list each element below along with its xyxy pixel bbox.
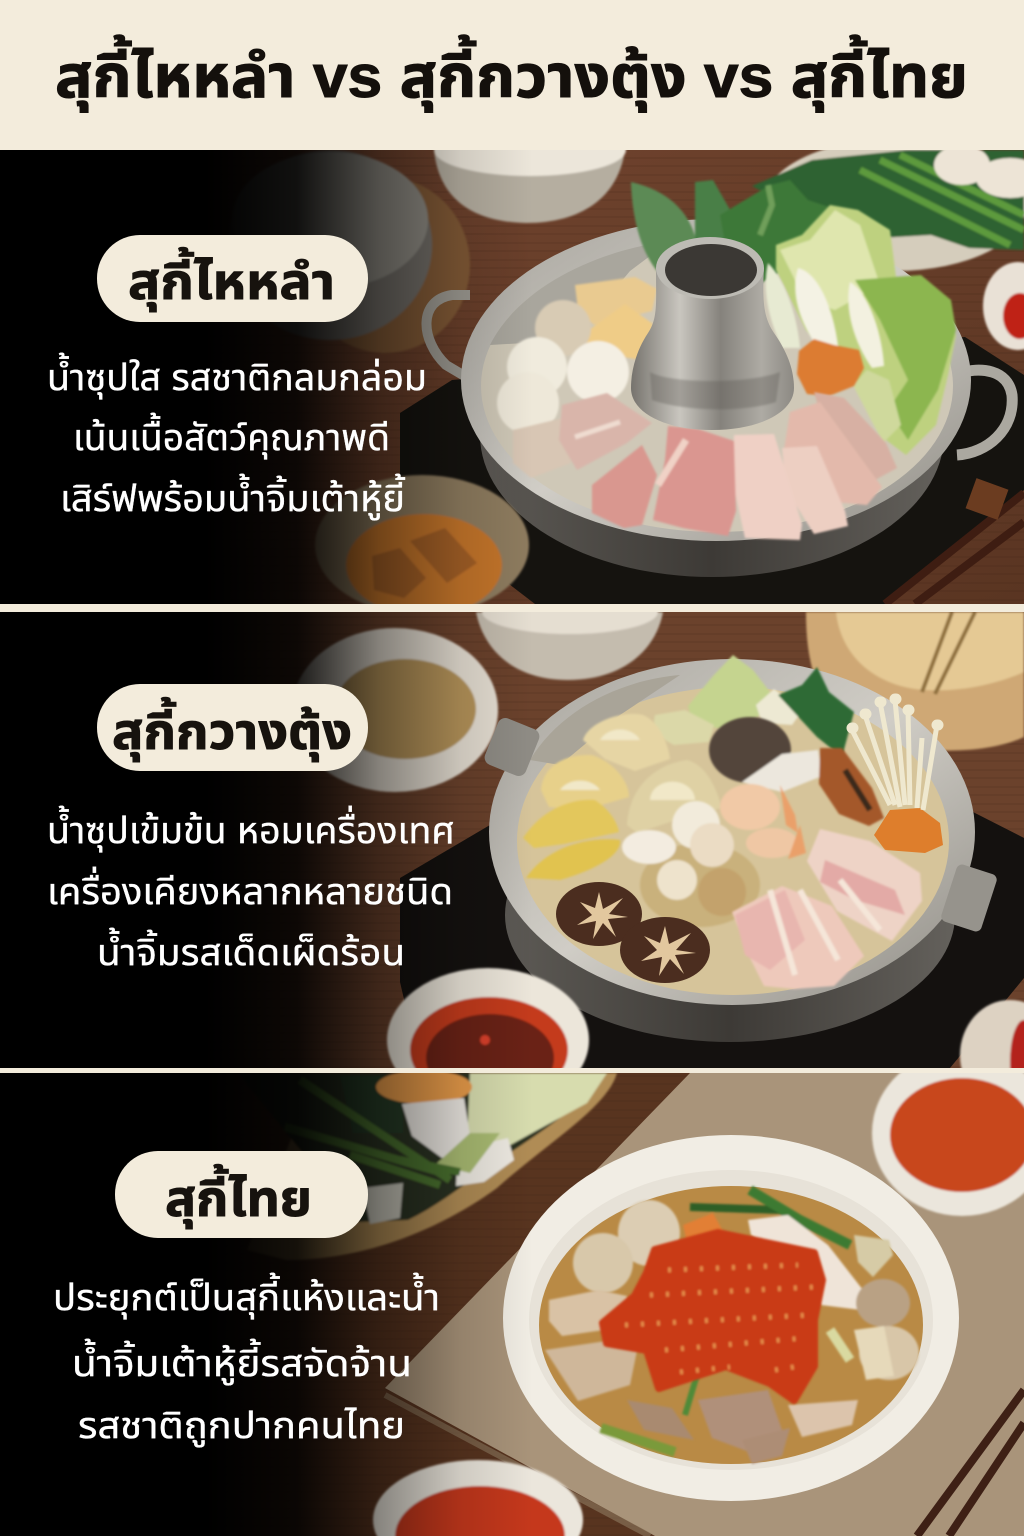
title xyxy=(0,0,1024,150)
soup ingredients: pork slices xyxy=(732,829,922,989)
badge: Cantonese suki xyxy=(97,684,368,771)
text block: Thai description: ประยุกต์เป็นสุกี้แห้งและน้ำ xyxy=(53,1272,440,1320)
soup ingredients: scallions and carrot xyxy=(766,263,884,396)
icon: sauce bowls xyxy=(373,1050,1024,1536)
icon: induction stove xyxy=(400,812,1024,1068)
soup ingredients: fish balls and bubbles xyxy=(622,801,760,927)
text block: Cantonese description xyxy=(47,805,455,973)
text block: Cantonese description: น้ำจิ้มรสเด็ดเผ็ดร้อน xyxy=(97,927,405,973)
badge: Cantonese suki: สุกี้กวางตุ้ง xyxy=(112,697,352,762)
text block: Thai description xyxy=(53,1272,440,1448)
soup ingredient: enoki xyxy=(852,699,938,810)
badge: Thai suki: สุกี้ไทย xyxy=(165,1164,312,1229)
text block: Hainan description: น้ำซุปใส รสชาติกลมกล่อม xyxy=(47,352,427,400)
soup ingredients: vegetables xyxy=(652,655,854,757)
icon: induction stove xyxy=(400,337,1024,604)
soup ingredient: central chimney xyxy=(631,237,794,430)
icon: tableware and steamer xyxy=(292,590,1024,792)
soup ingredients: pork and noodles xyxy=(545,1290,858,1464)
icon: chopsticks xyxy=(885,478,1024,604)
icon: hot pot xyxy=(426,180,1012,577)
panel: Hainan suki xyxy=(0,150,1024,604)
soup ingredient: carrot xyxy=(874,808,943,853)
icon: dipping sauce bowl xyxy=(315,475,529,616)
icon: chili dip bowl xyxy=(387,968,1024,1112)
icon: chopsticks xyxy=(917,1390,1024,1536)
text block: Cantonese description: น้ำซุปเข้มข้น หอมเครื่องเทศ xyxy=(47,805,455,853)
soup ingredients: mushrooms xyxy=(556,882,710,983)
icon: tableware at top xyxy=(228,124,1024,353)
title: สุกี้ไหหลำ vs สุกี้กวางตุ้ง vs สุกี้ไทย xyxy=(55,34,968,113)
panel: Thai suki xyxy=(0,1073,1024,1536)
text block: Cantonese description: เครื่องเคียงหลากหลายชนิด xyxy=(47,866,453,912)
text block: Hainan description: เสิร์ฟพร้อมน้ำจิ้มเต้าหู้ยี้ xyxy=(60,473,405,521)
soup ingredients: greens and seafood xyxy=(573,1190,919,1380)
icon: burlap placemat xyxy=(385,1073,1024,1536)
pot handles xyxy=(482,716,542,778)
soup topping: chili sauce xyxy=(603,1233,822,1400)
text block: Thai description: รสชาติถูกปากคนไทย xyxy=(78,1405,405,1448)
soup ingredients: pork slices xyxy=(513,392,897,540)
icon: vegetable tray xyxy=(238,1070,617,1260)
soup ingredients: fish balls and tofu xyxy=(497,277,657,434)
panel: Cantonese suki xyxy=(0,612,1024,1068)
text block: Hainan description: เน้นเนื้อสัตว์คุณภาพดี xyxy=(73,412,390,460)
soup ingredients: seafood xyxy=(709,717,884,859)
badge: Thai suki xyxy=(115,1151,368,1238)
soup ingredients: cabbage xyxy=(776,205,956,455)
icon: hot pot xyxy=(482,655,998,1042)
text block: Hainan description xyxy=(47,352,427,521)
badge: Hainan suki: สุกี้ไหหลำ xyxy=(128,247,335,312)
soup ingredients: leafy greens xyxy=(631,180,838,290)
pot handles xyxy=(426,295,470,378)
badge: Hainan suki xyxy=(97,235,368,322)
text block: Thai description: น้ำจิ้มเต้าหู้ยี้รสจัดจ้าน xyxy=(72,1338,412,1386)
soup ingredients: dumplings xyxy=(523,714,722,880)
icon: suki bowl xyxy=(503,1135,959,1501)
